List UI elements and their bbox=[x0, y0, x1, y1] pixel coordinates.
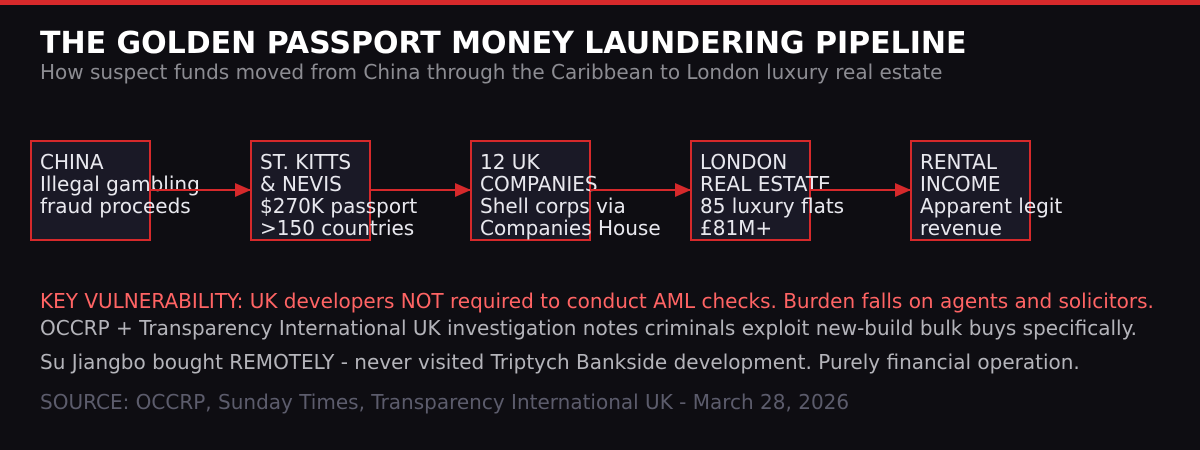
box: London real estate bbox=[691, 141, 844, 240]
note 1: OCCRP + Transparency International UK investigation notes criminals exploit new-build bulk buys specifically. bbox=[40, 316, 1137, 340]
box: St. Kitts bbox=[251, 141, 417, 240]
box: UK companies: COMPANIES bbox=[480, 172, 598, 196]
box: rental income: Apparent legit bbox=[920, 194, 1062, 218]
box: rental income: RENTAL bbox=[920, 150, 998, 174]
box: rental income bbox=[911, 141, 1062, 240]
note 2: Su Jiangbo bought REMOTELY - never visited Triptych Bankside development. Purely financial operation. bbox=[40, 350, 1080, 374]
box: UK companies: Shell corps via bbox=[480, 194, 626, 218]
box: UK companies: 12 UK bbox=[480, 150, 540, 174]
box: London real estate: LONDON bbox=[700, 150, 787, 174]
box: St. Kitts: >150 countries bbox=[260, 216, 414, 240]
box: China: fraud proceeds bbox=[40, 194, 191, 218]
box: London real estate: 85 luxury flats bbox=[700, 194, 844, 218]
pipeline bbox=[31, 141, 1062, 240]
box: China: Illegal gambling bbox=[40, 172, 200, 196]
arrows bbox=[150, 189, 910, 191]
box: UK companies bbox=[471, 141, 661, 240]
box: St. Kitts: ST. KITTS bbox=[260, 150, 351, 174]
box: China: CHINA bbox=[40, 150, 104, 174]
title: THE GOLDEN PASSPORT MONEY LAUNDERING PIPELINE bbox=[40, 26, 967, 61]
box: rental income: INCOME bbox=[920, 172, 1000, 196]
box: St. Kitts: & NEVIS bbox=[260, 172, 342, 196]
box: London real estate: £81M+ bbox=[700, 216, 772, 240]
box: St. Kitts: $270K passport bbox=[260, 194, 417, 218]
box: London real estate: REAL ESTATE bbox=[700, 172, 831, 196]
subtitle: How suspect funds moved from China through the Caribbean to London luxury real estate bbox=[40, 60, 942, 84]
box: UK companies: Companies House bbox=[480, 216, 661, 240]
key vulnerability: KEY VULNERABILITY: UK developers NOT required to conduct AML checks. Burden falls on agents and solicitors. bbox=[40, 289, 1154, 313]
box: rental income: revenue bbox=[920, 216, 1002, 240]
source: SOURCE: OCCRP, Sunday Times, Transparency International UK - March 28, 2026 bbox=[40, 390, 849, 414]
box: China bbox=[31, 141, 200, 240]
